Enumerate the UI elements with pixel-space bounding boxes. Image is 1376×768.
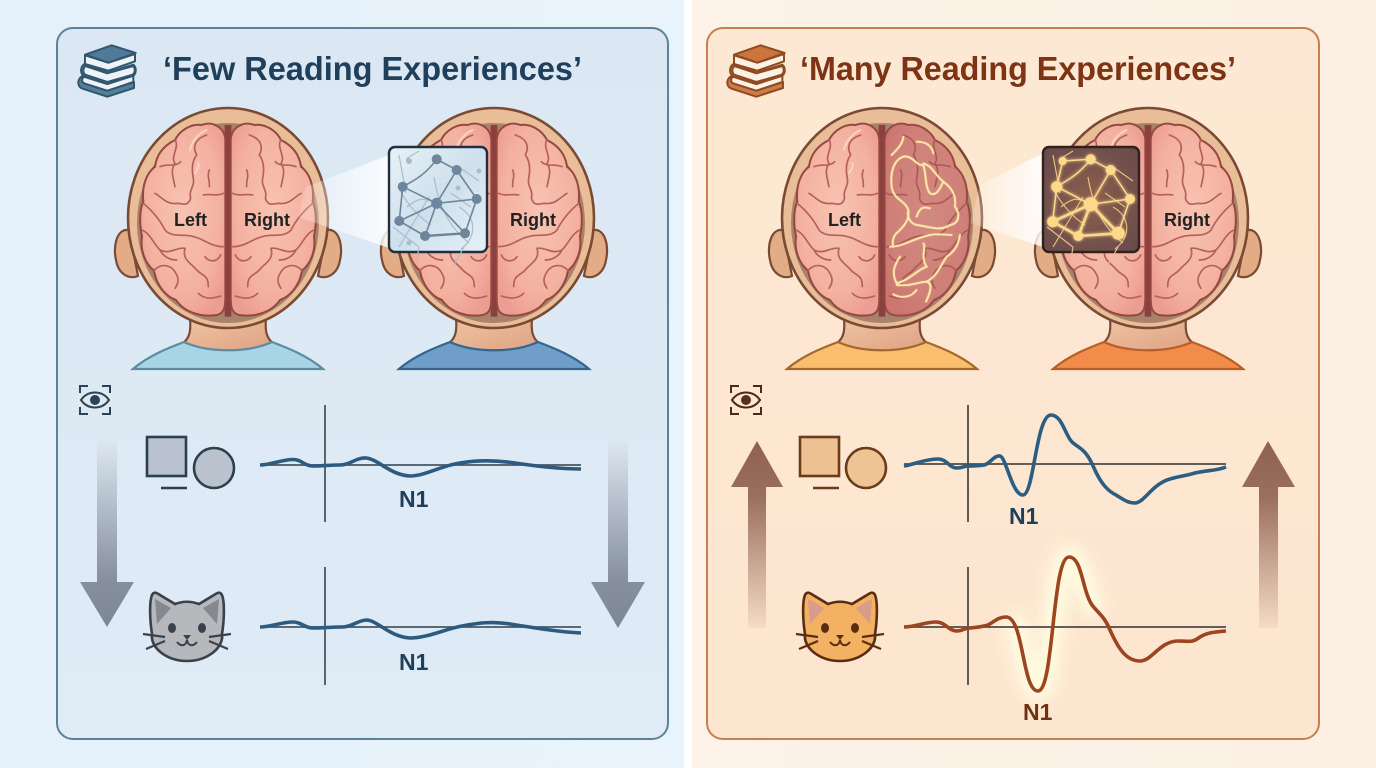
label: left hemisphere many: Left <box>828 210 861 230</box>
heading: few reading experiences: ‘Few Reading Experiences’ <box>163 50 582 87</box>
icon: eye with focus brackets, many <box>731 386 761 414</box>
shoulders: mid blue <box>399 342 589 369</box>
head 3 top view with glowing right hemisphere <box>769 108 995 369</box>
left page background <box>0 0 684 768</box>
right page background <box>692 0 1376 768</box>
inset: sparse neural network <box>389 147 487 265</box>
brain: left and right hemispheres <box>140 124 316 317</box>
label: N1 cat, few: N1 <box>399 649 429 675</box>
chart: ERP for symbols, many <box>904 405 1226 522</box>
panel frame: few <box>57 28 668 739</box>
icon: square and circle symbols, many <box>800 437 886 488</box>
arrow: increase left <box>731 441 783 628</box>
label: N1 cat, many: N1 <box>1023 699 1053 725</box>
arrow: increase right <box>1242 441 1295 628</box>
shoulders: light orange <box>787 342 977 369</box>
label: left hemisphere: Left <box>174 210 207 230</box>
icon: stack of orange books <box>727 45 785 97</box>
head 4 top view with brain <box>1035 108 1261 369</box>
darkened active hemisphere <box>885 124 970 316</box>
head 1 top view with brain <box>115 108 341 369</box>
arrow: decrease right <box>591 440 645 628</box>
chart: ERP for cat with glowing N1, many <box>904 557 1226 691</box>
label: right hemisphere: Right <box>244 210 290 230</box>
icon: square and circle symbols <box>147 437 234 488</box>
brain: third head <box>794 124 970 317</box>
arrow: decrease left <box>80 440 134 627</box>
inset: dense glowing neural network <box>1043 147 1139 265</box>
brain: second head <box>406 124 582 317</box>
chart: ERP for symbols, few <box>260 405 581 522</box>
glowing pathways in right hemisphere <box>890 137 960 302</box>
icon: orange cat <box>796 593 884 661</box>
label: right hemisphere many: Right <box>1164 210 1210 230</box>
heading: many reading experiences: ‘Many Reading Experiences’ <box>800 50 1236 87</box>
icon: grey cat <box>143 593 231 661</box>
chart: ERP for cat, few <box>260 567 581 685</box>
shoulders: orange <box>1053 342 1243 369</box>
head 2 top view with brain <box>381 108 607 369</box>
label: N1 symbols, few: N1 <box>399 486 429 512</box>
label: N1 symbols, many: N1 <box>1009 503 1039 529</box>
icon: eye with focus brackets <box>80 386 110 414</box>
brain: fourth head <box>1060 124 1236 317</box>
panel: many reading experiences <box>707 28 1319 739</box>
label: right hemisphere second head: Right <box>510 210 556 230</box>
panel frame: many <box>707 28 1319 739</box>
magnification beam many <box>970 153 1043 247</box>
magnification beam <box>298 155 389 248</box>
panel: few reading experiences <box>57 28 668 739</box>
shoulders: light blue <box>133 342 323 369</box>
icon: stack of blue books <box>78 45 136 97</box>
